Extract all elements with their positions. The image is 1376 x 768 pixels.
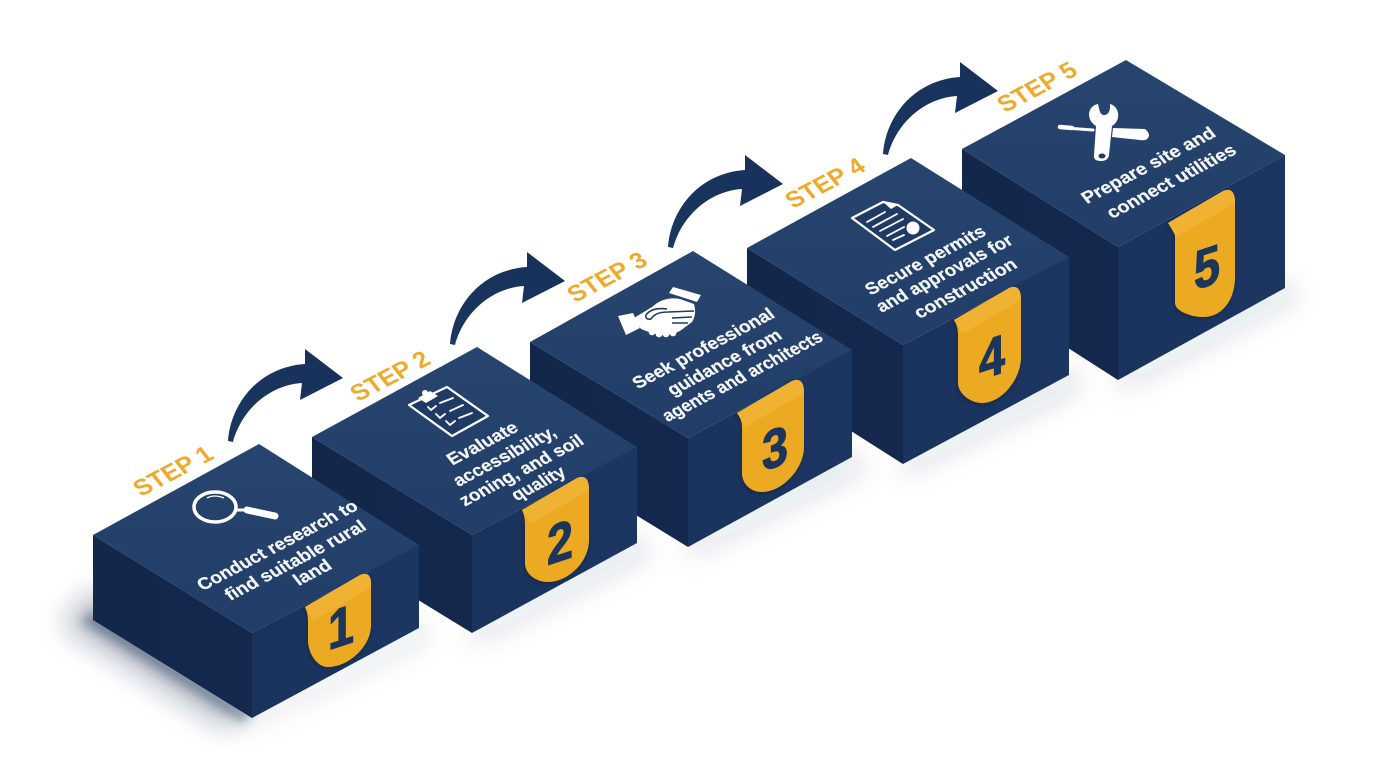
number tab 4 xyxy=(954,287,1021,403)
number tab 3 xyxy=(737,380,804,492)
floor shadows xyxy=(62,279,1298,728)
text: step 1 description: Conduct research to xyxy=(193,496,362,594)
panel: step 1 box xyxy=(93,444,419,718)
number tab 2 xyxy=(522,477,589,582)
arrow: step 3 to step 4 xyxy=(668,155,783,248)
panel: step 2 box xyxy=(312,347,637,633)
text: step 2 description: Evaluate xyxy=(442,418,522,469)
heading: step 5: STEP 5 xyxy=(992,58,1083,118)
text: step 4 description: Secure permits xyxy=(861,222,990,299)
heading: step 1: STEP 1 xyxy=(128,442,219,502)
text: step 5 description line 2: connect utilities xyxy=(1102,140,1240,222)
heading: step 2: STEP 2 xyxy=(345,347,436,407)
text: step 4 description line 2: and approvals for xyxy=(872,231,1017,316)
text: step 2 description line 2: accessibility, xyxy=(449,422,560,490)
text: step 2 description line 3: zoning, and soil xyxy=(455,431,588,510)
arrow: step 4 to step 5 xyxy=(883,62,998,155)
heading: step 4: STEP 4 xyxy=(780,153,871,214)
icon: handshake xyxy=(618,287,701,337)
icon: magnifying glass xyxy=(194,492,275,522)
panel: step 3 box xyxy=(530,251,852,547)
text: step 2 description line 4: quality xyxy=(507,462,570,504)
number 4: 4 xyxy=(979,323,1005,393)
text: step 1 description line 2: find suitable rural xyxy=(220,516,370,604)
number 5: 5 xyxy=(1194,233,1220,303)
number 3: 3 xyxy=(762,414,788,484)
arrow: step 1 to step 2 xyxy=(228,349,343,442)
text: step 4 description line 3: construction xyxy=(910,254,1021,322)
text: step 3 description: Seek professional xyxy=(628,304,779,392)
number tab 1 xyxy=(305,574,371,667)
number tab 5 xyxy=(1168,190,1235,317)
arrow: step 2 to step 3 xyxy=(450,252,565,345)
icon: wrench and screwdriver xyxy=(1060,104,1149,161)
text: step 3 description line 3: agents and architects xyxy=(658,327,827,425)
text: step 1 description line 3: land xyxy=(289,555,336,589)
panel: step 4 box xyxy=(747,158,1069,464)
text: step 3 description line 2: guidance from xyxy=(663,325,786,399)
number 1: 1 xyxy=(328,593,354,663)
heading: step 3: STEP 3 xyxy=(562,248,653,308)
icon: clipboard checklist xyxy=(409,387,488,436)
panel: step 5 box xyxy=(962,60,1285,380)
number 2: 2 xyxy=(547,508,573,578)
text: step 5 description: Prepare site and xyxy=(1077,123,1220,207)
icon: permit document xyxy=(852,202,934,250)
